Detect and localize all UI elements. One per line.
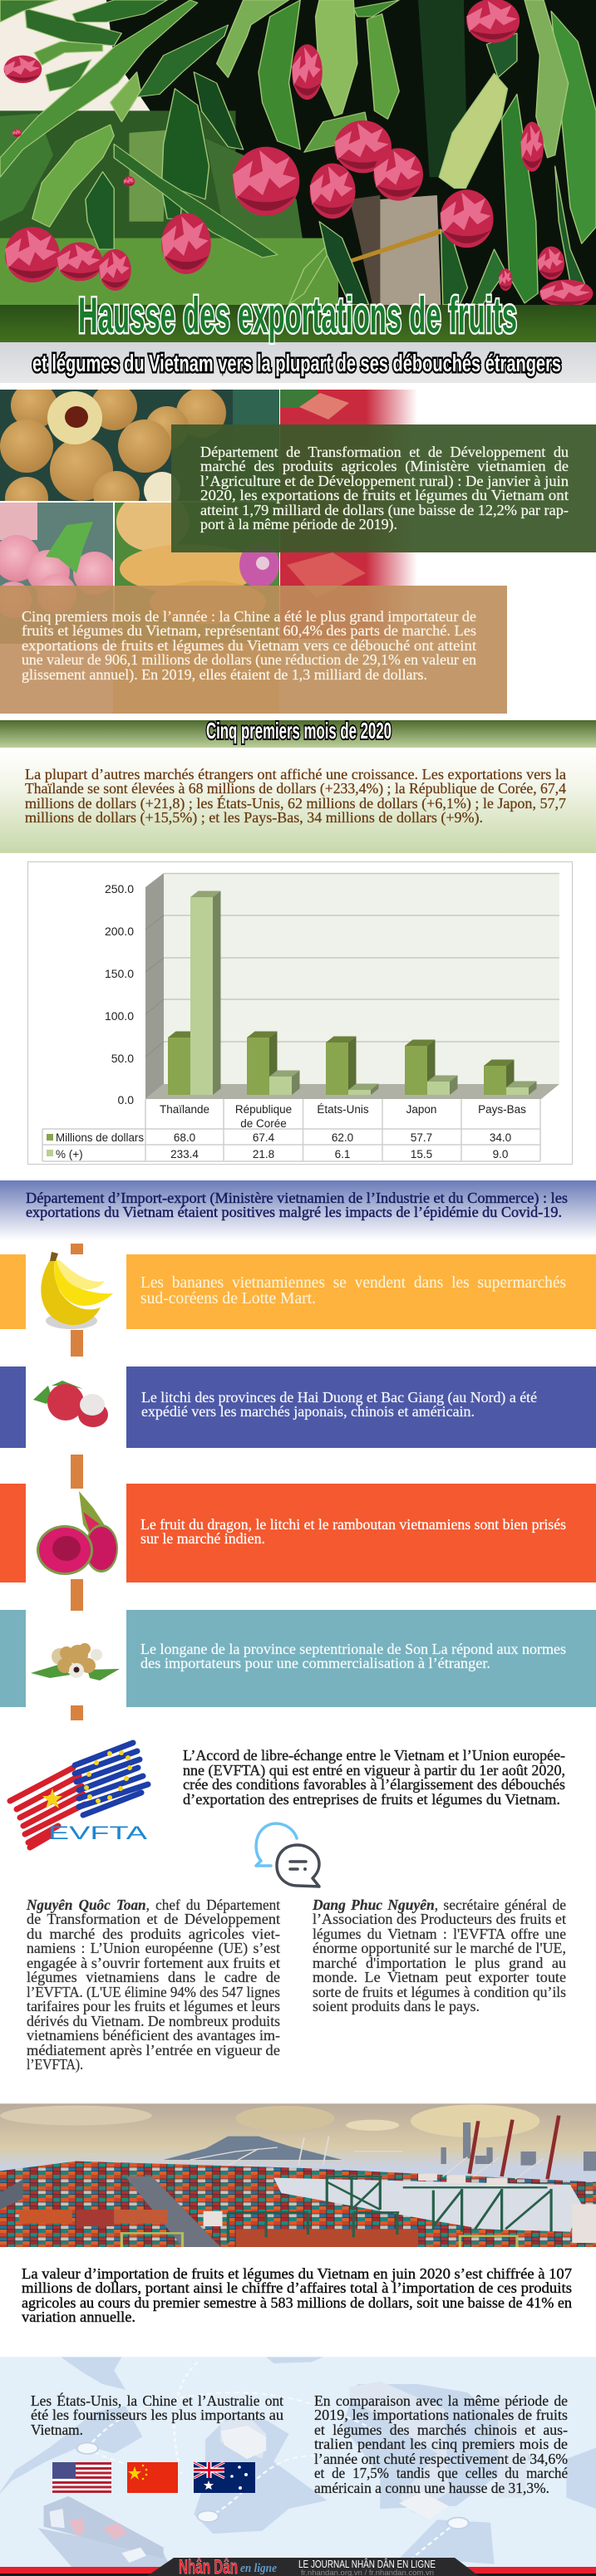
panel: department statement: Département de Transformation et de Développement du (200, 444, 569, 460)
bars: République de Corée (247, 1032, 299, 1095)
quote: Dang Phuc Nguyên (312, 1896, 566, 2014)
y axis labels: 250.0 (105, 882, 134, 895)
panel: other markets text: La plupart d’autres marchés étrangers ont affiché une croissance. Les exportations vers la (25, 766, 566, 783)
quote: Nguyên Quôc Toan: namiens : L’Union européenne (UE) s’est (27, 1940, 280, 1957)
quote: Dang Phuc Nguyên: énorme opportunité sur le marché de l'UE, (313, 1940, 566, 1956)
data table: 9.0 (493, 1148, 508, 1160)
panel: department statement: l’Agriculture et de Développement rural) : De janvier à juin (200, 473, 569, 490)
text block: main suppliers: Les États-Unis, la Chine et l’Australie ont (31, 2392, 283, 2409)
y axis labels: 0.0 (118, 1093, 134, 1106)
text block: EVFTA agreement: crée des conditions favorables à l’élargissement des débouchés (183, 1776, 565, 1793)
data table: République (235, 1103, 292, 1116)
y axis labels: 150.0 (105, 967, 134, 980)
quote: Nguyên Quôc Toan: médiatement après l’entrée en vigueur de (27, 2042, 280, 2058)
quote: Nguyên Quôc Toan: l’EVFTA). (27, 2056, 83, 2073)
text (140, 1274, 566, 1308)
quote: Dang Phuc Nguyên: sorte de fruits et légumes à condition qu’ils (313, 1984, 566, 2000)
connectors (71, 1244, 83, 1720)
data table: de Corée (240, 1117, 287, 1130)
text: sur le marché indien. (140, 1530, 265, 1547)
text block: import comparison: l’année ont chuté respectivement de 34,6% (314, 2451, 568, 2467)
icon: EVFTA flag logo (10, 1743, 148, 1847)
panel: China market (0, 586, 507, 714)
text block: import comparison (314, 2392, 568, 2496)
bars: Japon (405, 1040, 457, 1095)
panel: China market: glissement annuel). En 2019, elles étaient de 1,3 milliard de dollars. (22, 666, 427, 684)
text: Le fruit du dragon, le litchi et le ramboutan vietnamiens sont bien prisés (140, 1516, 566, 1533)
data table: 57.7 (411, 1131, 432, 1144)
bars: États-Unis (326, 1037, 379, 1095)
panel: other markets text (0, 748, 596, 853)
quote: Nguyên Quôc Toan: du marché des produits agricoles viet- (27, 1926, 280, 1942)
data table (42, 1099, 540, 1161)
quote: Dang Phuc Nguyên: légumes du Vietnam : l'EVFTA offre une (313, 1926, 566, 1942)
quote: Nguyên Quôc Toan: de Transformation et de Développement (27, 1911, 280, 1927)
text: expédié vers les marchés japonais, chinois et américain. (141, 1403, 475, 1420)
text block: EVFTA agreement: d’exportation des entreprises de fruits et légumes du Vietnam. (183, 1791, 560, 1808)
text block: import comparison: En comparaison avec la même période de (314, 2392, 568, 2409)
panel: China market: fruits et légumes du Vietnam, représentant 60,4% des parts de marché. Les (22, 622, 476, 639)
panel: China market: exportations de fruits et légumes du Vietnam vers ce débouché ont atteint (22, 637, 476, 654)
text: Les bananes vietnamiennes se vendent dans les supermarchés (140, 1274, 566, 1292)
icon: speech bubbles (256, 1823, 319, 1887)
panel: department statement: marché des produits agricoles (Ministère vietnamien de (200, 458, 569, 475)
section heading: first five months: Cinq premiers mois de 2020 (206, 718, 392, 743)
quote: Dang Phuc Nguyên: monde. Le Vietnam peut exporter toute (313, 1969, 566, 1985)
flag: China (127, 2462, 178, 2493)
icon: dragon fruit (37, 1491, 118, 1575)
icon: lychee (33, 1381, 108, 1427)
panel: import-export statement: exportations du Vietnam étaient positives malgré les impacts de l’épidémie du Covid-19. (26, 1204, 562, 1220)
world map background (0, 2357, 596, 2576)
y axis labels: 50.0 (111, 1052, 134, 1065)
quote: Nguyên Quôc Toan: l’EVFTA. (L'UE élimine 94% des 547 lignes (27, 1984, 280, 2001)
quote: Nguyên Quôc Toan: dérivés du Vietnam. De nombreux produits (27, 2013, 280, 2029)
flag: United States (52, 2462, 111, 2493)
text: des importateurs pour une commercialisation à l’étranger. (140, 1655, 490, 1671)
row: dragon fruit (0, 1484, 596, 1582)
y axis labels: 200.0 (105, 925, 134, 938)
text block: import value: variation annuelle. (22, 2309, 135, 2325)
data table: % (+) (56, 1148, 83, 1160)
quote: Dang Phuc Nguyên: soient produits dans le pays. (313, 1998, 480, 2014)
quote: Nguyên Quôc Toan: vietnamiens bénéficient des avantages im- (27, 2027, 280, 2044)
y axis labels: 100.0 (105, 1009, 134, 1023)
text block: import comparison: et de 17,5% tandis que celles du marché (314, 2465, 568, 2481)
data table: 68.0 (174, 1131, 195, 1144)
y axis labels (105, 882, 134, 1106)
text block: import value (22, 2265, 572, 2325)
text block: main suppliers (31, 2392, 283, 2438)
data table: 15.5 (411, 1148, 432, 1160)
quote: Nguyên Quôc Toan: engagée à s’ouvrir fortement aux fruits et (27, 1955, 280, 1971)
quote: Nguyên Quôc Toan: tarifaires pour les fruits et légumes et leurs (27, 1998, 280, 2014)
data table: Japon (406, 1103, 436, 1116)
text block: EVFTA agreement: L’Accord de libre-échange entre le Vietnam et l’Union europée- (183, 1747, 565, 1764)
text: sud-coréens de Lotte Mart. (140, 1290, 316, 1308)
text block: import comparison: et légumes des marchés chinois et aus- (314, 2421, 568, 2438)
data table: Millions de dollars (56, 1131, 144, 1144)
quote: Dang Phuc Nguyên: Dang Phuc Nguyên, secrétaire général de (312, 1896, 566, 1913)
panel: other markets text: Thaïlande se sont élevées à 68 millions de dollars (+233,4%) ; la République de Corée, 67,4 (25, 780, 566, 797)
text block: import comparison: tralien pendant les cinq premiers mois de (314, 2436, 568, 2452)
bars: Thaïlande (168, 891, 221, 1095)
panel: other markets text: millions de dollars (+15,5%) ; et les Pays-Bas, 34 millions de dollars (+9%). (25, 809, 483, 827)
photo collage: fruits (0, 390, 416, 644)
data table: 6.1 (335, 1148, 350, 1160)
panel: other markets text: millions de dollars (+21,8) ; les États-Unis, 62 millions de dollars (+6,1%) ; le Japon, 57,7 (25, 794, 566, 812)
text block: main suppliers: été les fournisseurs les plus importants au (31, 2407, 283, 2423)
text block: main suppliers: Vietnam. (31, 2421, 83, 2438)
quote: Dang Phuc Nguyên: l’Association des Producteurs des fruits et (313, 1911, 566, 1927)
panel: department statement: 2020, les exportations de fruits et légumes du Vietnam ont (200, 487, 569, 503)
text block: import comparison: américain a connu une hausse de 31,3%. (314, 2480, 549, 2496)
panel: department statement: port à la même période de 2019). (200, 516, 397, 533)
row: lychee (0, 1367, 596, 1448)
text (140, 1641, 566, 1671)
panel: import-export statement (0, 1180, 596, 1240)
data table: 21.8 (253, 1148, 274, 1160)
data table: 67.4 (253, 1131, 275, 1144)
bar chart: exports by market (28, 862, 572, 1165)
quote: Nguyên Quôc Toan (26, 1896, 280, 2073)
quote: Nguyên Quôc Toan: Nguyên Quôc Toan, chef du Département (26, 1896, 280, 1913)
data table: États-Unis (317, 1103, 369, 1116)
data table: 233.4 (170, 1148, 199, 1160)
text: Le longane de la province septentrionale de Son La répond aux normes (140, 1641, 566, 1657)
icon: EVFTA flag logo: EVFTA (48, 1823, 148, 1843)
quote: Nguyên Quôc Toan: légumes vietnamiens dans le cadre de (27, 1969, 280, 1985)
data table: 34.0 (490, 1131, 511, 1144)
text: Le litchi des provinces de Hai Duong et Bac Giang (au Nord) a été (141, 1389, 537, 1406)
footer: publisher banner: LE JOURNAL NHÂN DÂN EN LIGNE (298, 2558, 436, 2570)
row: bananas (0, 1252, 596, 1329)
footer: publisher banner: en ligne (240, 2562, 277, 2575)
row: longan (0, 1610, 596, 1707)
quote: Dang Phuc Nguyên: marché d'importation le plus grand au (313, 1955, 566, 1971)
icon: longan (31, 1643, 120, 1681)
data table: 62.0 (332, 1131, 353, 1144)
data table: Pays-Bas (478, 1103, 526, 1116)
port photo (0, 2103, 596, 2247)
section heading: first five months (0, 718, 596, 748)
panel: department statement (171, 424, 596, 552)
hero photo: dragon fruit plant (0, 0, 596, 307)
panel: China market: Cinq premiers mois de l’année : la Chine a été le plus grand importateur de (22, 608, 476, 625)
text block: EVFTA agreement: nne (EVFTA) qui est entré en vigueur à partir du 1er août 2020, (183, 1762, 565, 1779)
text block: EVFTA agreement (183, 1747, 565, 1808)
text block: import value: agricoles au cours du premier semestre à 583 millions de dollars, soit une baisse de 41% en (22, 2294, 572, 2311)
panel: department statement: atteint 1,79 milliard de dollars (une baisse de 12,2% par rap- (200, 502, 569, 519)
data table: Thaïlande (160, 1103, 209, 1116)
icon: bananas (41, 1252, 113, 1329)
footer: publisher banner (0, 2556, 596, 2576)
panel: China market: une valeur de 906,1 millions de dollars (une réduction de 29,1% en valeur en (22, 651, 476, 669)
text block: import value: La valeur d’importation de fruits et légumes du Vietnam en juin 2020 s’est chiffrée à 107 (22, 2265, 572, 2282)
panel: import-export statement: Département d’Import-export (Ministère vietnamien de l’Industrie et du Commerce) : les (26, 1190, 568, 1207)
flag: Australia (194, 2462, 255, 2493)
bars: Pays-Bas (484, 1060, 537, 1095)
text block: import comparison: 2019, les importations nationales de fruits (314, 2407, 568, 2423)
text (140, 1516, 566, 1547)
text (141, 1389, 537, 1420)
text block: import value: millions de dollars, portant ainsi le chiffre d’affaires total à l’importation de ces produits (22, 2279, 572, 2296)
title band (0, 287, 596, 383)
